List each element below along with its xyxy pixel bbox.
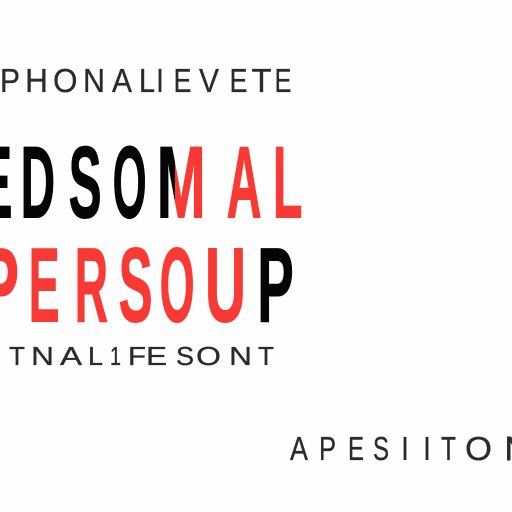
top line of thin lettering: E [230,62,248,99]
lower line of thin lettering: N [31,341,54,371]
top line of thin lettering: H [25,62,48,99]
top line of thin lettering: O [53,62,78,99]
bottom right lettering: E [348,430,364,467]
large headline row one: EDSOM AL: S [69,125,102,239]
lower line of thin lettering: T [258,341,274,371]
bottom right lettering: A [290,430,308,467]
large headline row one: EDSOM AL [0,146,302,219]
bottom right lettering: S [373,430,389,467]
lower line of thin lettering: N [229,341,252,371]
lower line of thin lettering: S [176,341,194,371]
lower line of thin lettering: F [128,341,146,371]
top line of thin lettering: N [83,62,105,99]
top line of thin lettering: P [0,62,20,99]
lower line of thin lettering: A [60,341,83,371]
large headline row one: EDSOM AL: D [21,125,55,239]
top line of thin lettering: I [156,62,164,99]
lower line of thin lettering: O [196,341,221,371]
top line of thin lettering: V [199,62,219,99]
bottom right lettering [290,430,512,467]
top line of thin lettering: L [139,62,155,99]
bottom right lettering: I [401,430,409,467]
lower line of thin lettering: 1 [110,341,121,371]
lower line of thin lettering: L [88,341,103,371]
lower line of thin lettering [9,341,274,371]
top line of thin lettering [0,62,292,99]
bottom right lettering: O [465,430,492,467]
bottom right lettering: T [441,430,456,467]
bottom right lettering: I [423,430,431,467]
lower line of thin lettering: T [9,341,25,371]
infographic canvas [0,68,512,460]
top line of thin lettering: T [252,62,272,99]
large headline row two: PERSOUP: E [29,225,60,344]
top line of thin lettering: E [274,62,292,99]
top line of thin lettering: A [112,62,132,99]
top line of thin lettering: E [174,62,192,99]
bottom right lettering: P [319,430,336,467]
lower line of thin lettering: E [146,341,167,371]
